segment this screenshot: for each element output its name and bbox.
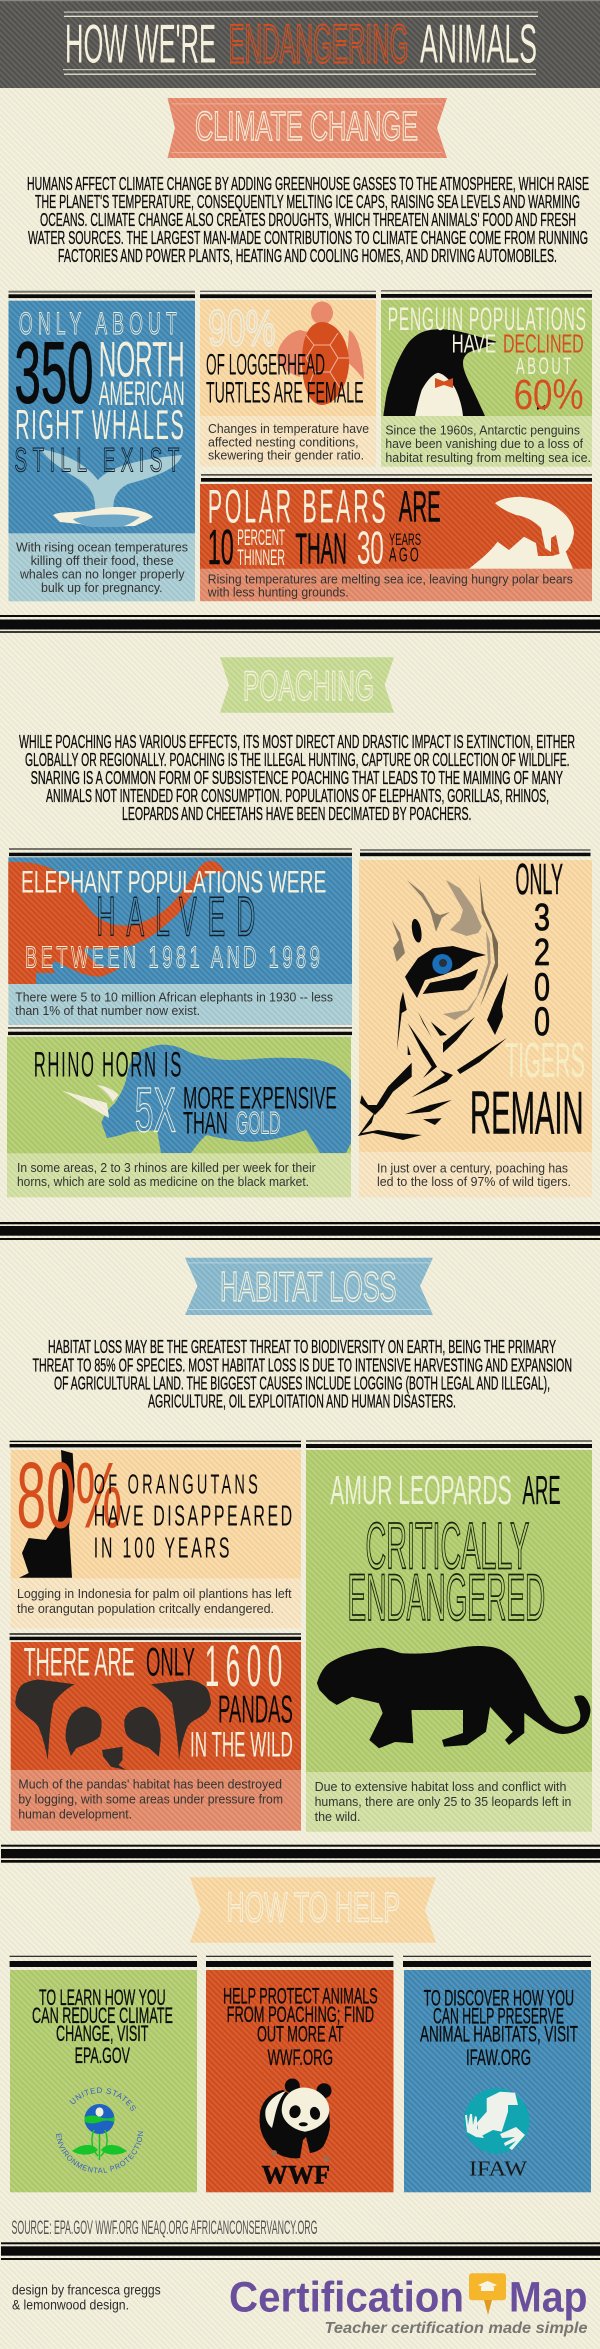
headline: penguins	[388, 301, 587, 419]
panel: loggerhead turtles	[200, 300, 376, 467]
caption: whales: bulk up for pregnancy.	[41, 580, 163, 595]
headline: rhinos: MORE EXPENSIVE	[183, 1079, 337, 1115]
banner: climate change: CLIMATE CHANGE	[195, 103, 418, 149]
text: WWF call to action	[223, 1984, 378, 2070]
banner: habitat loss: HABITAT LOSS	[220, 1263, 396, 1310]
headline: polar bears: AGO	[389, 545, 421, 567]
text: WWF call to action: OUT MORE AT	[257, 2022, 344, 2046]
text: EPA call to action: TO LEARN HOW YOU	[39, 1985, 166, 2010]
panel: amur leopards	[306, 1450, 592, 1832]
caption: pandas: by logging, with some areas under pressure from	[18, 1792, 283, 1806]
panel: pandas: IN THE WILD	[190, 1725, 293, 1765]
icon: orangutan	[19, 1450, 75, 1578]
caption: elephants: than 1% of that number now exist.	[15, 1003, 200, 1018]
headline: elephants: HALVED	[96, 885, 266, 948]
headline: tigers	[470, 856, 585, 1146]
text: IFAW call to action: IFAW.ORG	[466, 2045, 531, 2070]
caption: penguins	[385, 422, 591, 465]
headline: orangutans: IN 100 YEARS	[94, 1532, 232, 1564]
headline: whales: ONLY ABOUT	[19, 305, 182, 341]
caption: leopards: Due to extensive habitat loss and conflict with	[315, 1779, 566, 1794]
headline: orangutans	[16, 1442, 295, 1564]
panel: loggerhead turtles: TURTLES ARE FEMALE	[206, 376, 364, 409]
headline: turtles	[206, 300, 364, 409]
headline: polar bears: THINNER	[237, 545, 285, 570]
headline: penguins: 60%	[514, 371, 584, 419]
panel: tigers	[358, 856, 592, 1197]
headline: tigers: 2	[534, 932, 550, 974]
icon: leopard	[317, 1646, 590, 1748]
panel: elephants	[8, 857, 352, 1025]
logo text: IFAW: IFAW	[469, 2157, 527, 2181]
logo: Certification Map: Map	[509, 2274, 588, 2322]
title	[65, 14, 537, 74]
panel: polar bears	[200, 479, 592, 601]
text: EPA call to action: EPA.GOV	[75, 2043, 130, 2068]
design credit: design by francesca greggs	[12, 2282, 161, 2298]
icon: elephant trunk	[8, 861, 225, 984]
headline: pandas: ONLY	[146, 1641, 195, 1685]
icon: turtle	[277, 302, 364, 405]
text: IFAW call to action	[420, 1986, 578, 2070]
headline: tigers: 0	[534, 966, 550, 1009]
headline: polar bears: 10	[208, 520, 234, 575]
caption: elephants	[15, 990, 333, 1018]
headline: rhinos: 5X	[135, 1076, 176, 1146]
headline: tigers: 3	[534, 897, 550, 939]
headline: whales: 350	[14, 324, 94, 421]
caption: penguins: have been vanishing due to a loss of	[385, 436, 583, 451]
headline: pandas: THERE ARE	[24, 1641, 135, 1685]
headline: turtles: 90%	[208, 300, 276, 357]
caption: rhinos: In some areas, 2 to 3 rhinos are killed per week for their	[17, 1160, 316, 1175]
panel: orangutans	[11, 1442, 301, 1628]
design credit	[12, 2282, 161, 2312]
banner: how to help	[190, 1877, 436, 1943]
text: WWF call to action: WWF.ORG	[268, 2045, 333, 2070]
panel: polar bears: ARE	[399, 484, 441, 532]
panel: right whales	[8, 301, 195, 601]
caption: whales	[16, 540, 188, 595]
icon: whale tail	[40, 449, 182, 527]
caption: orangutans: Logging in Indonesia for palm oil plantions has left	[17, 1586, 292, 1601]
logo text: WWF: WWF	[262, 2160, 330, 2189]
banner: habitat loss	[185, 1258, 433, 1315]
headline: elephants	[21, 863, 326, 974]
caption: whales: With rising ocean temperatures	[16, 540, 188, 554]
text: WWF call to action: FROM POACHING; FIND	[227, 2002, 374, 2027]
headline: turtles: OF LOGGERHEAD	[206, 348, 325, 381]
headline: elephants: ELEPHANT POPULATIONS WERE	[21, 863, 326, 899]
panel: rhinos	[7, 1037, 351, 1197]
headline: polar bears: PERCENT	[237, 525, 285, 550]
caption: turtles: skewering their gender ratio.	[208, 448, 364, 463]
panel: pandas: PANDAS	[218, 1688, 293, 1731]
caption: orangutans	[17, 1586, 292, 1616]
panel: right whales: NORTH	[99, 332, 185, 388]
icon: EPA seal: UNITED STATES	[70, 2088, 136, 2111]
caption: turtles: Changes in temperature have	[208, 421, 369, 436]
icon: rhino	[62, 1045, 351, 1153]
caption: turtles	[208, 421, 369, 463]
headline: polar bears	[208, 479, 441, 575]
headline: penguins: HAVE	[452, 331, 496, 359]
text block: climate change intro	[27, 174, 589, 266]
icon: EPA seal: ENVIRONMENTAL PROTECTION AGENCY	[56, 2131, 143, 2173]
headline: leopards	[330, 1467, 561, 1634]
headline: orangutans: HAVE DISAPPEARED	[94, 1501, 295, 1533]
icon: EPA seal	[56, 2088, 143, 2173]
caption: elephants: There were 5 to 10 million African elephants in 1930 -- less	[15, 990, 333, 1004]
headline: polar bears: POLAR BEARS	[208, 479, 388, 532]
caption: penguins: habitat resulting from melting sea ice.	[385, 450, 591, 465]
panel: right whales: RIGHT WHALES	[15, 401, 185, 448]
panel: right whales: AMERICAN	[99, 375, 185, 413]
panel: pandas	[11, 1634, 301, 1831]
panel: help habitat (IFAW)	[404, 1970, 591, 2192]
icon: map pin	[469, 2273, 506, 2315]
headline: rhinos: THAN	[183, 1104, 228, 1140]
text: WWF call to action: HELP PROTECT ANIMALS	[223, 1984, 378, 2008]
caption: whales: whales can no longer properly	[19, 566, 185, 582]
caption: polar bears: with less hunting grounds.	[207, 584, 349, 600]
header band	[0, 0, 600, 88]
text: EPA call to action: CHANGE, VISIT	[56, 2021, 148, 2046]
text block: poaching intro	[19, 732, 575, 824]
headline: whales	[14, 305, 185, 480]
icon: polar bear	[469, 497, 574, 569]
caption: turtles: affected nesting conditions,	[208, 434, 359, 449]
headline: rhinos	[34, 1045, 337, 1146]
caption: leopards: humans, there are only 25 to 35 leopards left in	[315, 1794, 571, 1809]
caption: pandas: Much of the pandas' habitat has been destroyed	[18, 1776, 282, 1792]
title: HOW WE'RE	[65, 14, 216, 74]
icon: WWF panda	[260, 2078, 332, 2189]
headline: tigers: 0	[534, 1000, 550, 1044]
caption: rhinos	[17, 1160, 316, 1189]
caption: whales: killing off their food, these	[31, 553, 174, 568]
headline: polar bears: YEARS	[389, 530, 421, 549]
headline: polar bears: THAN	[295, 525, 347, 573]
icon: panda face	[15, 1680, 211, 1770]
text: EPA call to action	[32, 1985, 173, 2068]
headline: orangutans: 80%	[16, 1442, 122, 1547]
caption: tigers: led to the loss of 97% of wild tigers.	[377, 1174, 571, 1189]
headline: polar bears: 30	[357, 521, 384, 573]
caption: tigers: In just over a century, poaching has	[377, 1160, 568, 1176]
headline: rhinos: RHINO HORN IS	[34, 1045, 183, 1085]
logo: Certification Map: Teacher certification made simple	[324, 2320, 588, 2337]
banner: poaching: POACHING	[243, 662, 374, 709]
panel: help climate (EPA)	[10, 1970, 197, 2192]
panel: help poaching (WWF)	[206, 1970, 394, 2192]
caption: orangutans: the orangutan population critcally endangered.	[17, 1601, 274, 1616]
caption: rhinos: horns, which are sold as medicine on the black market.	[17, 1174, 309, 1189]
text: EPA call to action: CAN REDUCE CLIMATE	[32, 2003, 173, 2028]
caption: leopards: the wild.	[315, 1809, 360, 1824]
banner: poaching	[220, 657, 394, 713]
design credit: & lemonwood design.	[12, 2296, 129, 2312]
headline: whales: STILL EXIST	[14, 442, 185, 480]
caption: tigers	[377, 1160, 571, 1189]
logo: Certification Map: Certification	[229, 2274, 464, 2322]
headline: elephants: BETWEEN 1981 AND 1989	[25, 939, 323, 974]
caption: pandas	[18, 1776, 283, 1822]
banner: climate change	[168, 98, 447, 158]
caption: leopards	[315, 1779, 571, 1824]
headline: orangutans: OF ORANGUTANS	[94, 1468, 261, 1499]
panel: pandas: 1600	[205, 1634, 289, 1699]
icon: IFAW logo	[464, 2088, 529, 2181]
icon: penguin	[383, 329, 545, 416]
banner: how to help: HOW TO HELP	[227, 1883, 400, 1930]
caption: polar bears: Rising temperatures are melting sea ice, leaving hungry polar bears	[208, 571, 573, 586]
logo: Certification Map	[229, 2273, 588, 2337]
headline: rhinos: GOLD	[236, 1104, 280, 1140]
caption: pandas: human development.	[18, 1806, 132, 1822]
headline: pandas	[24, 1634, 293, 1765]
text block: habitat loss intro	[32, 1337, 572, 1412]
caption: polar bears	[207, 571, 573, 600]
icon: tiger face	[358, 875, 508, 1140]
panel: penguins	[381, 300, 592, 467]
caption: penguins: Since the 1960s, Antarctic penguins	[385, 422, 580, 438]
